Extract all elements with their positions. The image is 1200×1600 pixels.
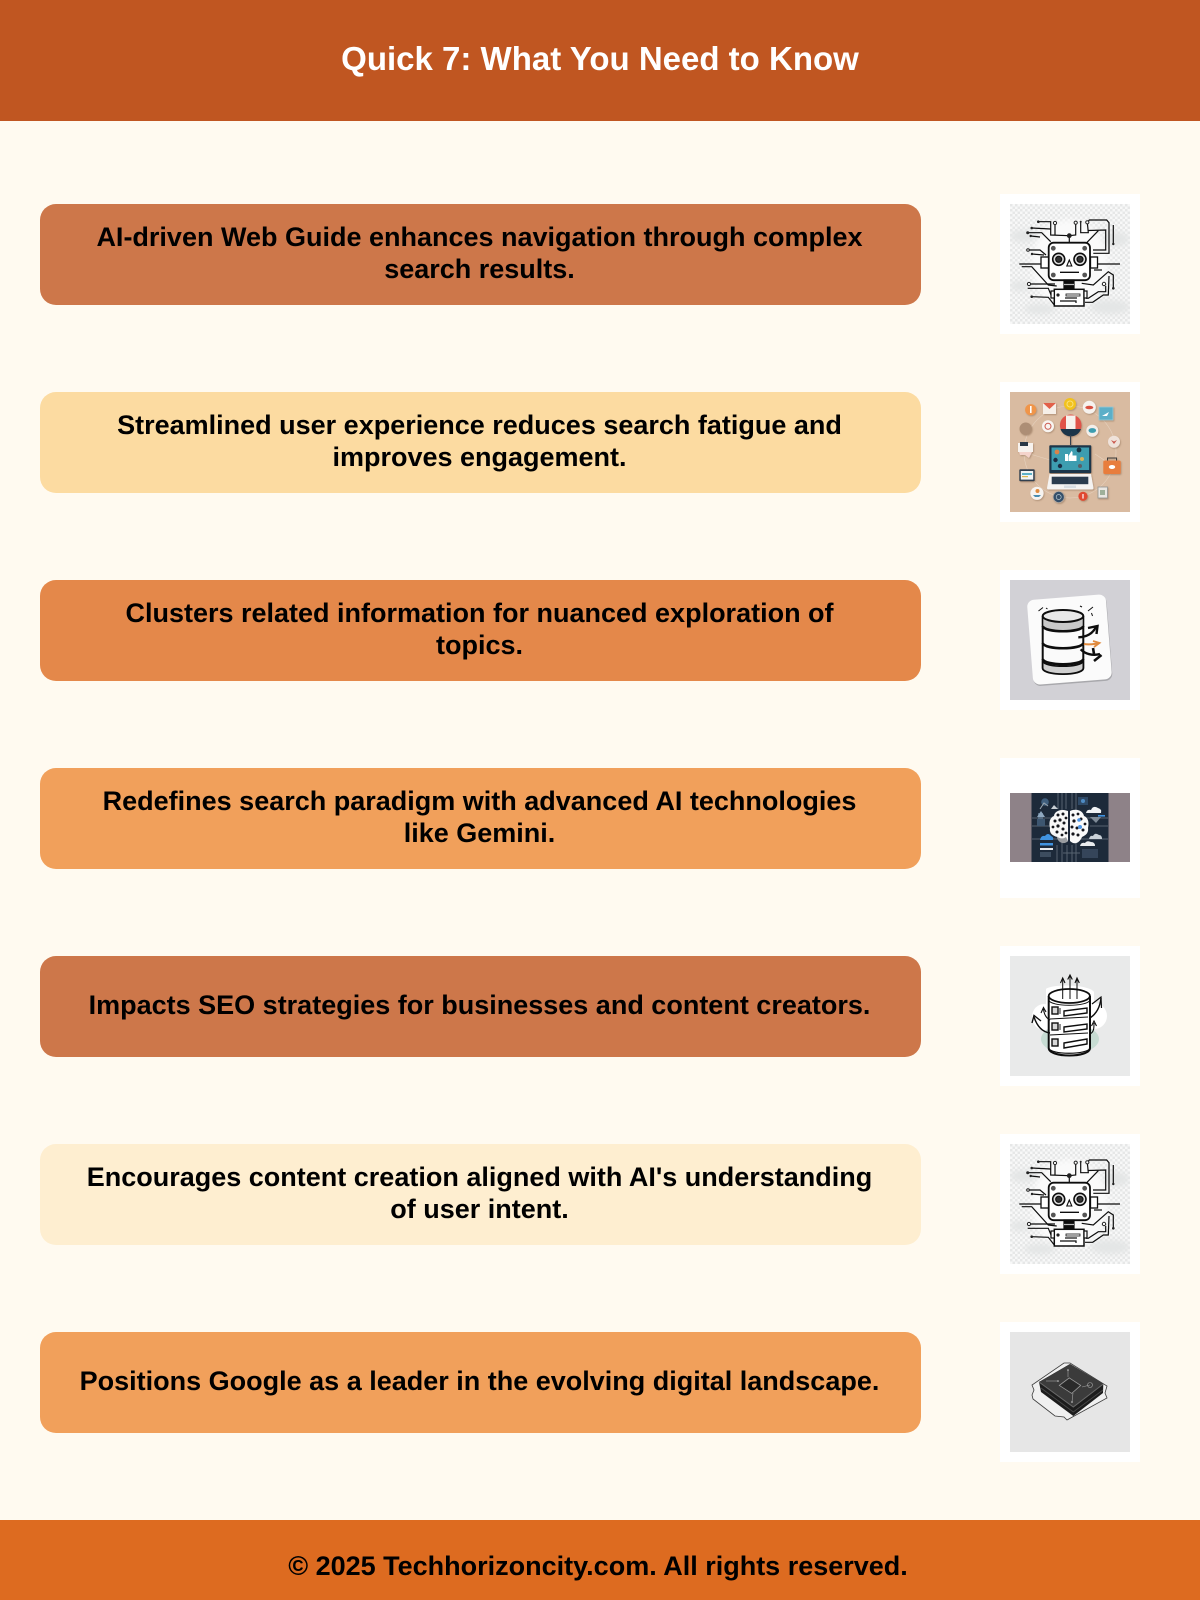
row 5: Impacts SEO strategies	[40, 946, 1140, 1086]
text panel 5	[40, 956, 921, 1057]
text panel 3: topics.	[436, 630, 523, 660]
icon: isometric chip	[1000, 1322, 1140, 1462]
text panel 3: Clusters related information for nuanced exploration of	[125, 598, 834, 628]
row 7: Positions Google as a leader	[40, 1322, 1140, 1462]
text panel 5: Impacts SEO strategies for businesses and content creators.	[89, 990, 870, 1020]
text panel 2: improves engagement.	[332, 442, 627, 472]
icon: robot circuit	[1000, 194, 1140, 334]
icon: laptop with social icons	[1000, 382, 1140, 522]
text panel 6: Encourages content creation aligned with AI's understanding	[87, 1162, 872, 1192]
row 6: Encourages content creation	[40, 1134, 1140, 1274]
title: Quick 7: What You Need to Know	[341, 40, 859, 77]
icon: brain on circuit board	[1000, 758, 1140, 898]
text panel 6: of user intent.	[390, 1194, 569, 1224]
icon: server cylinder with arrows	[1000, 946, 1140, 1086]
row 4: Redefines search paradigm	[40, 758, 1140, 898]
text panel 6	[40, 1144, 921, 1245]
header banner	[0, 0, 1200, 121]
icon: database with arrows	[1000, 570, 1140, 710]
text panel 2: Streamlined user experience reduces search fatigue and	[117, 410, 842, 440]
footer copyright text: © 2025 Techhorizoncity.com. All rights reserved.	[288, 1551, 908, 1581]
text panel 4: like Gemini.	[404, 818, 555, 848]
footer banner	[0, 1520, 1200, 1600]
text panel 4	[40, 768, 921, 869]
row 3: Clusters related information	[40, 570, 1140, 710]
text panel 7: Positions Google as a leader in the evolving digital landscape.	[80, 1366, 879, 1396]
text panel 1: AI-driven Web Guide enhances navigation through complex	[96, 222, 863, 252]
text panel 2	[40, 392, 921, 493]
row 1: AI-driven Web Guide	[40, 194, 1140, 334]
text panel 1	[40, 204, 921, 305]
text panel 4: Redefines search paradigm with advanced AI technologies	[103, 786, 856, 816]
text panel 1: search results.	[384, 254, 575, 284]
text panel 3	[40, 580, 921, 681]
text panel 7	[40, 1332, 921, 1433]
row 2: Streamlined user experience	[40, 382, 1140, 522]
icon: robot circuit	[1000, 1134, 1140, 1274]
